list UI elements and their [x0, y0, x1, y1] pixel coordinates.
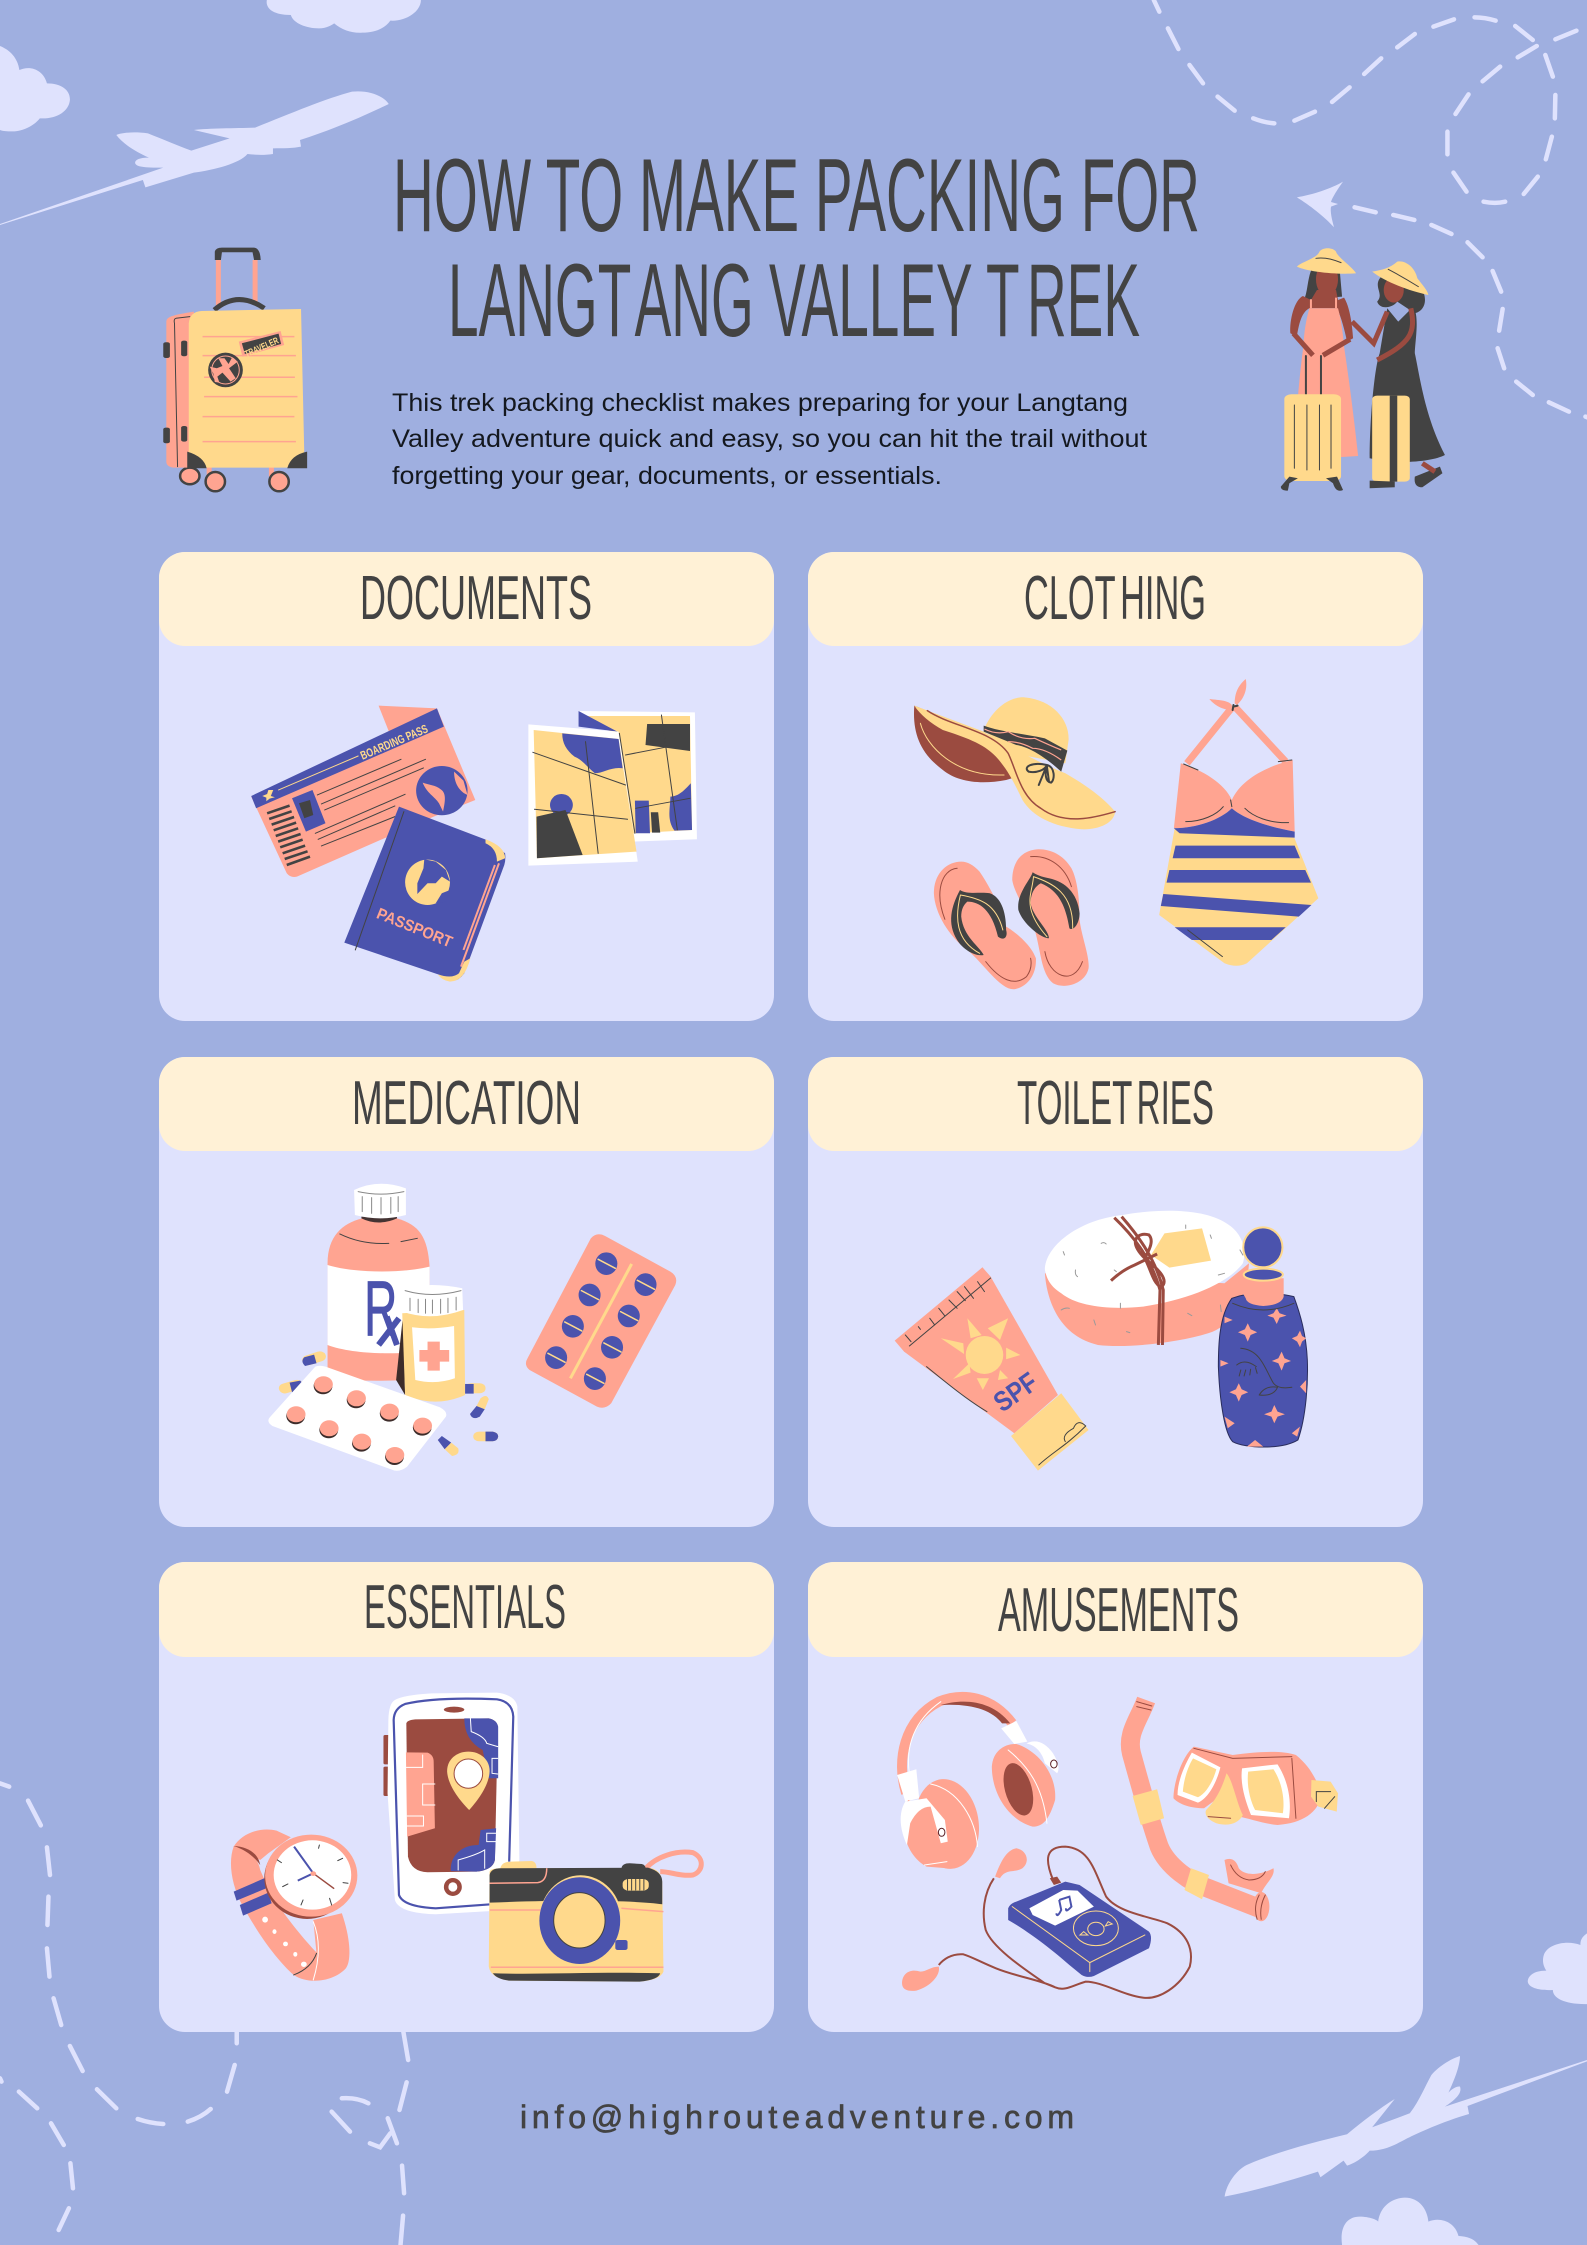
icon: pill bottles and blister packs: [268, 1184, 676, 1471]
icon: phone, watch and camera: [231, 1693, 701, 1982]
panel: toiletries: [808, 1057, 1423, 1527]
decoration: bottom right plane and clouds: [1225, 1932, 1587, 2245]
decoration: top clouds and plane: [0, 0, 421, 225]
panel: amusements: [808, 1562, 1423, 2032]
icon: sun hat, flip flops and swimsuit: [914, 679, 1318, 989]
panel: clothing: [808, 552, 1423, 1021]
icon: headphones, snorkel mask and music player: [897, 1697, 1338, 1998]
text: Rx label: R: [364, 1265, 397, 1353]
icon: two travellers with suitcases: [1281, 248, 1445, 491]
panel: medication: [159, 1057, 774, 1527]
panel: documents: [159, 552, 774, 1021]
heading: medication: MEDICATION: [352, 1069, 581, 1138]
heading: essentials: ESSENTIALS: [364, 1573, 566, 1642]
text: passport label: PASSPORT: [374, 906, 455, 951]
intro text block: Valley adventure quick and easy, so you can hit the trail without: [392, 425, 1147, 453]
title: [393, 138, 1200, 359]
icon: yellow suitcase: [163, 248, 307, 491]
panel: essentials: [159, 1562, 774, 2032]
heading: amusements: AMUSEMENTS: [998, 1576, 1239, 1645]
icon: boarding pass, passport and map: [251, 706, 697, 982]
icon: soap, sunscreen and perfume bottle: [895, 1211, 1308, 1471]
intro text block: [392, 389, 1147, 490]
intro text block: This trek packing checklist makes preparing for your Langtang: [392, 389, 1128, 417]
decoration: top right dashed flight path: [1154, 0, 1587, 418]
footer contact email: info@highrouteadventure.com: [520, 2099, 1074, 2135]
text: boarding pass label: BOARDING PASS: [358, 722, 430, 763]
intro text block: forgetting your gear, documents, or essentials.: [392, 462, 942, 490]
text: traveler tag: TRAVELER: [243, 335, 281, 360]
decoration: bottom left dashed flight paths: [0, 1783, 408, 2245]
heading: documents: DOCUMENTS: [360, 564, 592, 633]
heading: clothing: CLOTHING: [1024, 564, 1206, 633]
text: SPF label: SPF: [988, 1366, 1043, 1418]
heading: toiletries: TOILETRIES: [1017, 1069, 1214, 1138]
title: LANGTANG VALLEY TREK: [448, 243, 1140, 359]
